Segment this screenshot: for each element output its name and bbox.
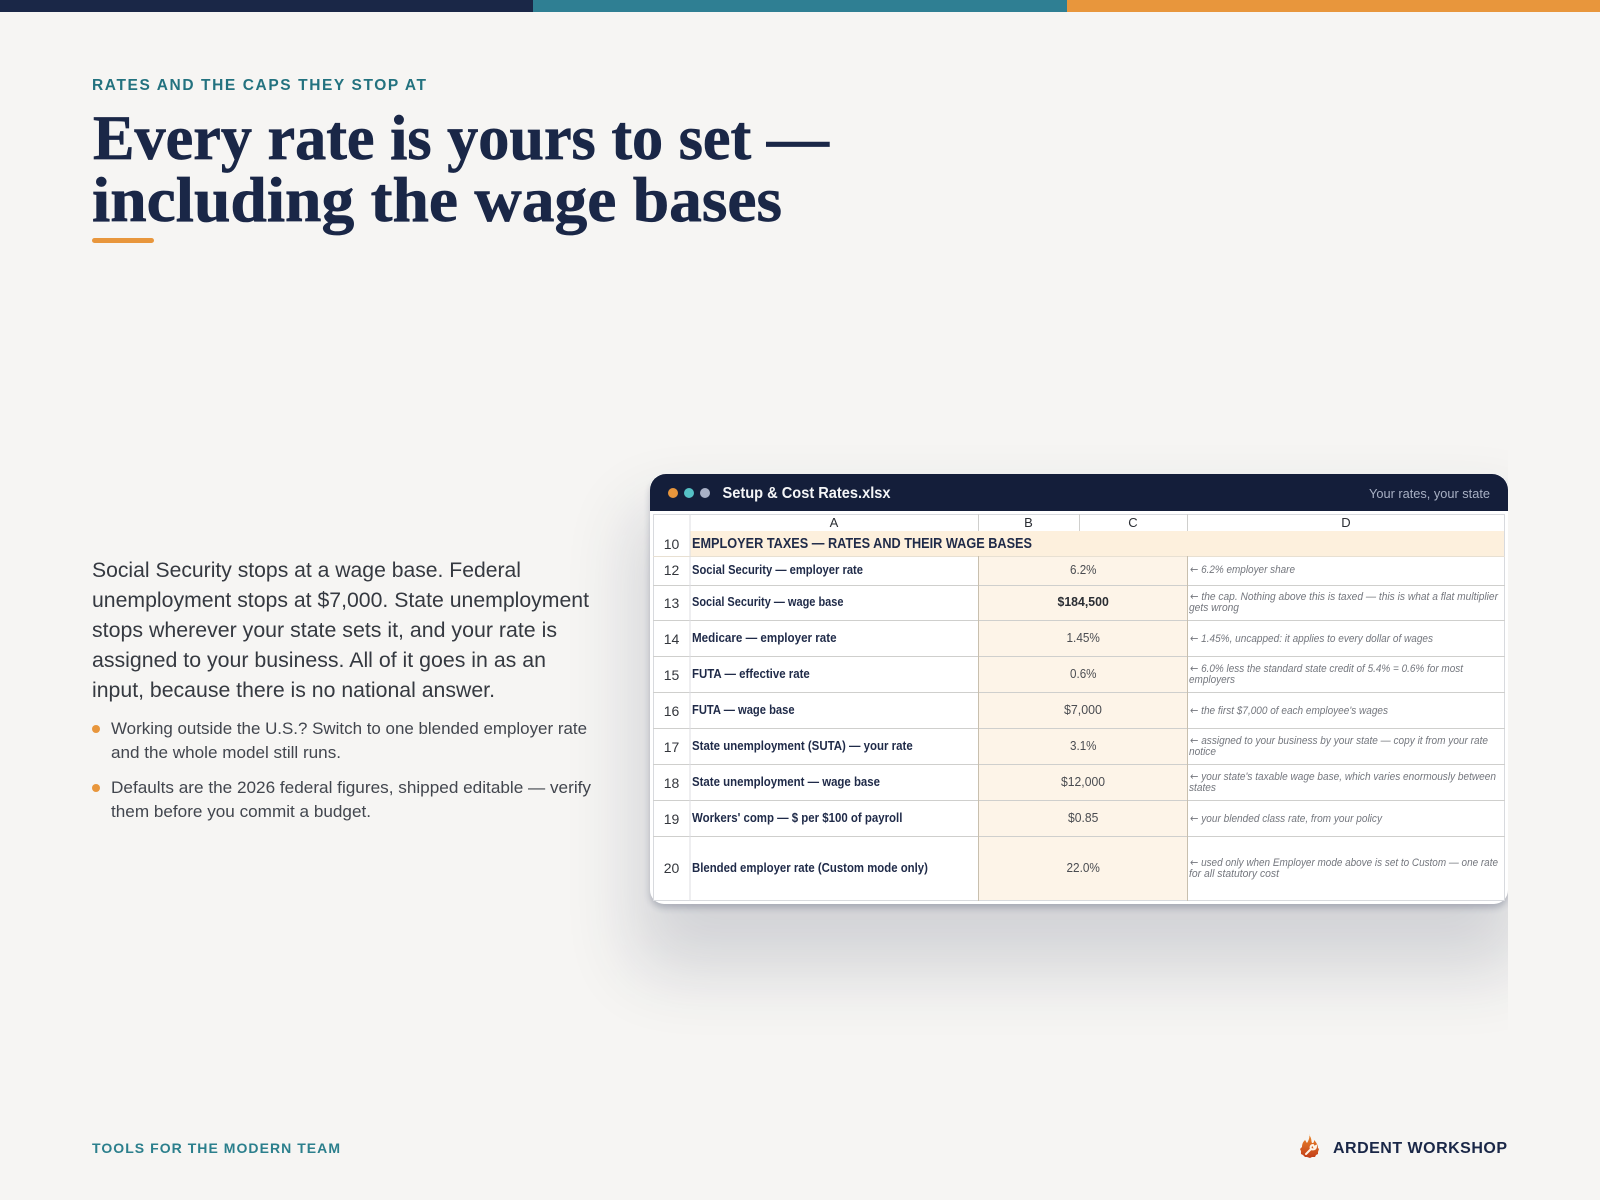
- row 14: 1.45%: [1066, 631, 1100, 645]
- bullet: working outside the U.S.: Working outside the U.S.? Switch to one blended employer rate: [111, 719, 587, 738]
- bullet: working outside the U.S.: and the whole model still runs.: [111, 743, 341, 762]
- row 13: gets wrong: [1189, 602, 1240, 614]
- window shadow: [635, 480, 1525, 970]
- row 17: 3.1%: [1070, 739, 1096, 753]
- row 19: Workers' comp — $ per $100 of payroll: [692, 811, 902, 825]
- row 13: 13: [664, 595, 679, 611]
- row 13: $184,500: [1058, 595, 1109, 609]
- column headers: A: [830, 515, 839, 530]
- row 17: [664, 734, 1488, 758]
- row 12: Social Security — employer rate: [692, 563, 863, 577]
- row 18: [664, 770, 1496, 794]
- row 20: 22.0%: [1066, 861, 1100, 875]
- top colour bar: [0, 0, 1600, 12]
- row 12: 12: [664, 562, 679, 578]
- row 14: 14: [664, 631, 679, 647]
- row 18: ← your state's taxable wage base, which varies enormously between: [1190, 770, 1496, 783]
- row 15: employers: [1189, 674, 1235, 686]
- row 17: State unemployment (SUTA) — your rate: [692, 739, 913, 753]
- row 17: notice: [1189, 746, 1216, 758]
- footer tagline: TOOLS FOR THE MODERN TEAM: [92, 1140, 340, 1156]
- bullet: defaults: them before you commit a budget.: [111, 802, 371, 821]
- row 15: FUTA — effective rate: [692, 667, 810, 681]
- title underline: [92, 238, 154, 243]
- row 20: [664, 856, 1498, 880]
- row 16: 16: [664, 703, 679, 719]
- window caption: Your rates, your state: [1369, 486, 1490, 501]
- row 18: 18: [664, 775, 679, 791]
- title: Every rate is yours to set —: [93, 102, 830, 173]
- row 13: Social Security — wage base: [692, 595, 844, 609]
- column headers: D: [1341, 515, 1351, 530]
- row 18: $12,000: [1061, 775, 1105, 789]
- row 10 section heading: EMPLOYER TAXES — RATES AND THEIR WAGE BASES: [692, 536, 1032, 552]
- file name: Setup & Cost Rates.xlsx: [722, 485, 891, 502]
- body paragraph: unemployment stops at $7,000. State unemployment: [92, 589, 589, 612]
- bullet: working outside the U.S.: [92, 719, 587, 762]
- body paragraph: stops wherever your state sets it, and your rate is: [92, 619, 557, 642]
- row 12: ← 6.2% employer share: [1190, 563, 1295, 576]
- row 19: $0.85: [1068, 811, 1098, 825]
- title: including the wage bases: [92, 164, 782, 235]
- icon: flame with wrench: [1300, 1134, 1319, 1158]
- spreadsheet grid: [653, 514, 1505, 901]
- row 17: ← assigned to your business by your state — copy it from your rate: [1190, 734, 1488, 747]
- window controls: [668, 488, 710, 498]
- row 12: 6.2%: [1070, 563, 1096, 577]
- window title bar: [650, 474, 1508, 511]
- row 18: states: [1189, 782, 1216, 794]
- body paragraph: Social Security stops at a wage base. Federal: [92, 559, 521, 582]
- body paragraph: assigned to your business. All of it goes in as an: [92, 649, 546, 672]
- body paragraph: input, because there is no national answer.: [92, 679, 495, 702]
- brand name: ARDENT WORKSHOP: [1333, 1140, 1507, 1157]
- row 16: FUTA — wage base: [692, 703, 795, 717]
- column headers: C: [1128, 515, 1138, 530]
- row 16: $7,000: [1064, 703, 1102, 717]
- bullet: defaults: [92, 778, 591, 821]
- bullet: defaults: Defaults are the 2026 federal figures, shipped editable — verify: [111, 778, 591, 797]
- row 14: [664, 631, 1433, 647]
- row 20: 20: [664, 860, 679, 876]
- row 15: [664, 662, 1464, 686]
- row 13: ← the cap. Nothing above this is taxed — this is what a flat multiplier: [1190, 590, 1499, 603]
- row 10 section heading: 10: [664, 536, 679, 552]
- row 20: Blended employer rate (Custom mode only): [692, 861, 928, 875]
- window body: [650, 474, 1508, 904]
- row 15: ← 6.0% less the standard state credit of 5.4% = 0.6% for most: [1190, 662, 1464, 675]
- row 16: ← the first $7,000 of each employee's wages: [1190, 704, 1388, 717]
- row 17: 17: [664, 739, 679, 755]
- row 12: [664, 562, 1295, 578]
- column headers: B: [1024, 515, 1033, 530]
- row 19: ← your blended class rate, from your policy: [1190, 812, 1383, 825]
- row 15: 0.6%: [1070, 667, 1096, 681]
- row 19: [664, 811, 1383, 827]
- row 20: for all statutory cost: [1189, 868, 1280, 880]
- row 15: 15: [664, 667, 679, 683]
- column headers: [830, 515, 1351, 530]
- row 13: [664, 590, 1499, 614]
- row 19: 19: [664, 811, 679, 827]
- row 18: State unemployment — wage base: [692, 775, 880, 789]
- spreadsheet window: [650, 474, 1508, 904]
- row 14: Medicare — employer rate: [692, 631, 837, 645]
- title: [92, 102, 830, 235]
- row 16: [664, 703, 1388, 719]
- row 14: ← 1.45%, uncapped: it applies to every dollar of wages: [1190, 632, 1433, 645]
- eyebrow: RATES AND THE CAPS THEY STOP AT: [92, 77, 427, 94]
- body paragraph: [92, 559, 589, 702]
- spreadsheet fills: [690, 531, 1505, 901]
- row 20: ← used only when Employer mode above is set to Custom — one rate: [1190, 856, 1498, 869]
